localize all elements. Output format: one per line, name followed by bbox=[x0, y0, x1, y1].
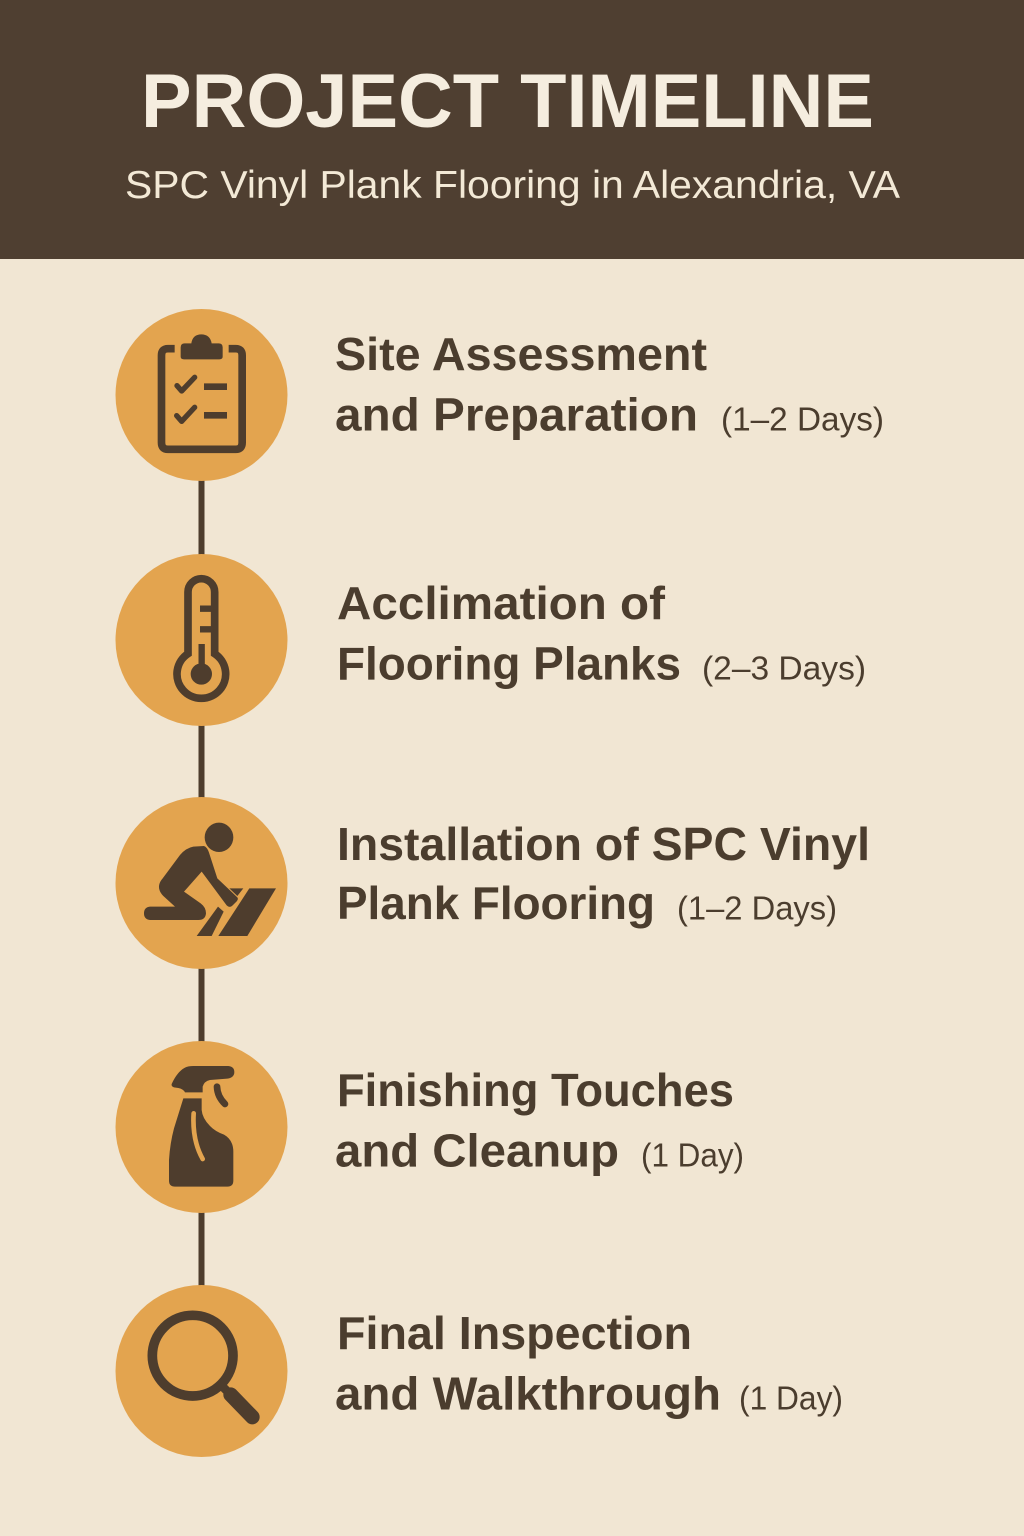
step 1 text: and Preparation bbox=[335, 388, 698, 440]
step 4 text: and Cleanup bbox=[335, 1124, 619, 1176]
step 5 icon: magnifying glass bbox=[116, 1285, 288, 1457]
step 3 icon: worker laying planks bbox=[116, 797, 288, 969]
step 1 text bbox=[335, 328, 884, 440]
step 3 text: (1–2 Days) bbox=[677, 890, 837, 926]
subtitle: SPC Vinyl Plank Flooring in Alexandria, VA bbox=[125, 164, 900, 207]
timeline connector lines bbox=[198, 478, 204, 1290]
step 2 icon: thermometer bbox=[116, 554, 288, 726]
step 5 text: (1 Day) bbox=[739, 1380, 843, 1416]
step 3 text: Installation of SPC Vinyl bbox=[337, 818, 870, 870]
step 2 text: Acclimation of bbox=[337, 577, 666, 629]
step 2 text bbox=[337, 577, 866, 690]
step 4 text: (1 Day) bbox=[641, 1136, 744, 1174]
step 4 text: Finishing Touches bbox=[337, 1064, 734, 1116]
title: PROJECT TIMELINE bbox=[141, 59, 874, 144]
step 2 text: Flooring Planks bbox=[337, 638, 681, 690]
step 2 text: (2–3 Days) bbox=[702, 650, 866, 686]
step 1 text: (1–2 Days) bbox=[721, 400, 884, 438]
step 3 text: Plank Flooring bbox=[337, 877, 655, 929]
step 4 text bbox=[335, 1064, 744, 1176]
step 4 icon: spray bottle bbox=[116, 1041, 288, 1213]
step 5 text: and Walkthrough bbox=[335, 1368, 721, 1420]
header banner bbox=[0, 0, 1024, 259]
step 3 text bbox=[337, 818, 870, 929]
step 5 text bbox=[335, 1307, 843, 1420]
step 1 text: Site Assessment bbox=[335, 328, 707, 380]
step 5 text: Final Inspection bbox=[337, 1307, 692, 1359]
step 1 icon: clipboard checklist bbox=[116, 309, 288, 481]
